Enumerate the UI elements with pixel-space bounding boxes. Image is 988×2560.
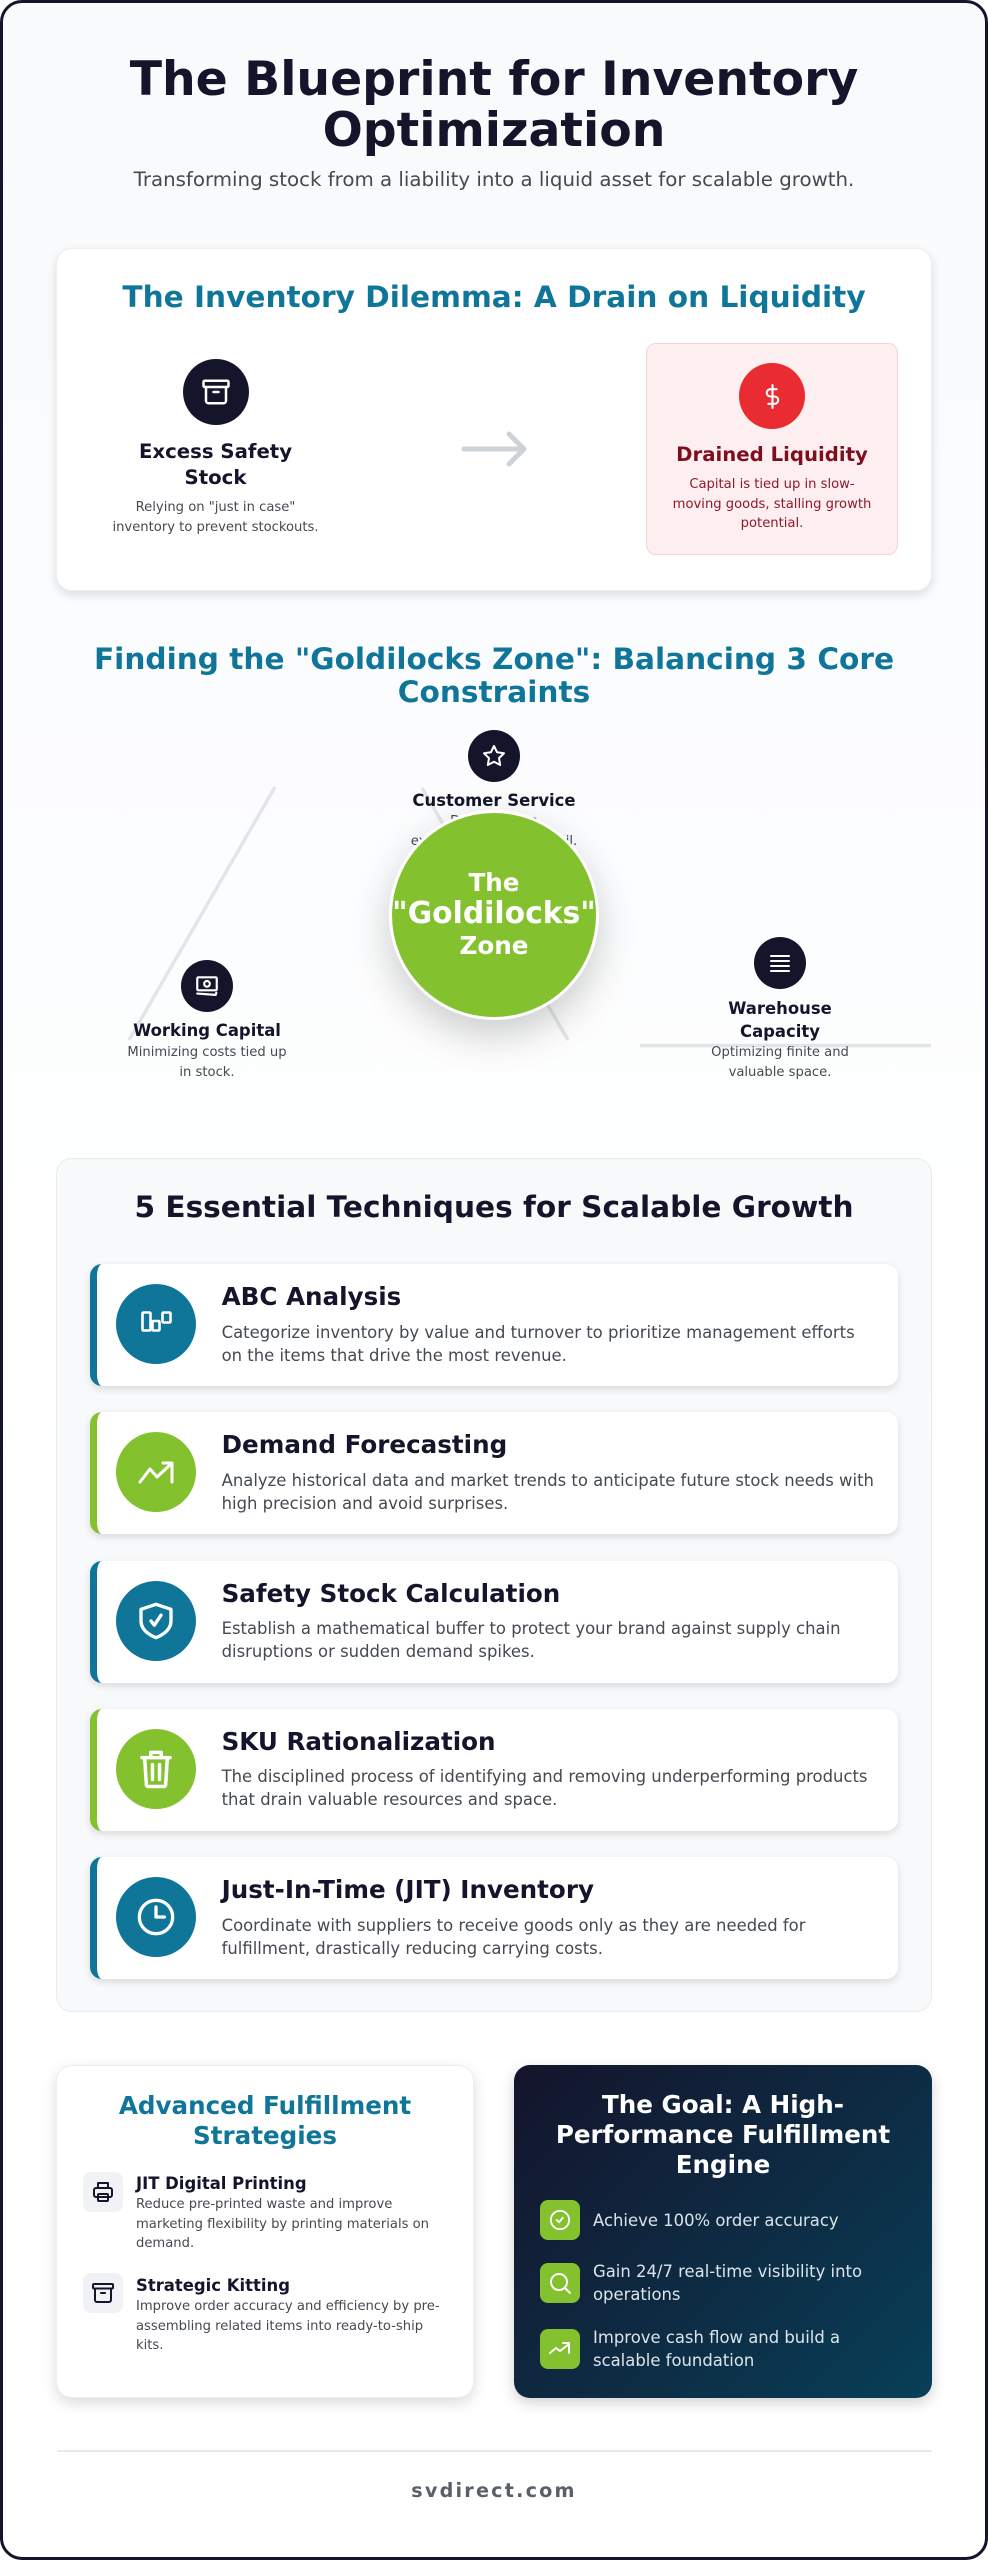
demand forecasting title: Demand Forecasting [222, 1430, 507, 1459]
icon: star [468, 730, 520, 782]
heading: goldilocks zone [94, 642, 894, 709]
safety stock title: Safety Stock Calculation [222, 1578, 560, 1608]
panel: the goal [514, 2065, 932, 2398]
demand forecasting description: high precision and avoid surprises. [222, 1494, 508, 1513]
JIT digital printing description: Reduce pre-printed waste and improve [136, 2197, 392, 2212]
JIT digital printing description: demand. [136, 2236, 194, 2251]
SKU rationalization title: SKU Rationalization [222, 1727, 496, 1756]
warehouse capacity description: valuable space. [729, 1065, 831, 1080]
icon: growth [540, 2329, 580, 2369]
drained liquidity description: potential. [741, 516, 803, 531]
central circle: goldilocks zone: The [468, 868, 519, 896]
excess safety stock description: Relying on "just in case" [136, 500, 295, 515]
ABC analysis title: ABC Analysis [222, 1282, 401, 1311]
central circle: goldilocks zone: "Goldilocks" [392, 896, 596, 930]
warehouse capacity description [711, 1045, 849, 1080]
heading: advanced fulfillment: Strategies [193, 2121, 337, 2150]
strategic kitting title: Strategic Kitting [136, 2276, 290, 2295]
title: Optimization [323, 103, 665, 158]
working capital description: Minimizing costs tied up [127, 1045, 287, 1060]
SKU rationalization description: that drain valuable resources and space. [222, 1790, 557, 1809]
working capital description [127, 1045, 287, 1080]
goal text: order accuracy: Achieve 100% order accuracy [593, 2211, 839, 2230]
heading: advanced fulfillment: Advanced Fulfillment [119, 2091, 411, 2120]
JIT description: Coordinate with suppliers to receive goods only as they are needed for [222, 1916, 806, 1934]
icon: check circle [540, 2200, 580, 2240]
drained liquidity heading: Drained Liquidity [676, 443, 868, 466]
heading: the goal: The Goal: A High- [602, 2090, 844, 2119]
strategic kitting description: Improve order accuracy and efficiency by pre- [136, 2299, 440, 2314]
safety stock description [222, 1619, 841, 1661]
subtitle: Transforming stock from a liability into a liquid asset for scalable growth. [134, 168, 854, 191]
heading: the goal: Engine [676, 2150, 770, 2179]
customer service description [411, 814, 577, 849]
card: safety stock calculation [90, 1560, 898, 1682]
JIT digital printing title: JIT Digital Printing [136, 2174, 307, 2193]
ABC analysis description: on the items that drive the most revenue. [222, 1346, 567, 1364]
goal text: real-time visibility: operations [593, 2285, 680, 2304]
connector lines [128, 786, 931, 1048]
SKU rationalization description: The disciplined process of identifying and removing underperforming products [222, 1767, 868, 1786]
excess safety stock description [112, 500, 319, 535]
icon: printer [83, 2172, 123, 2212]
panel: techniques [56, 1158, 932, 2012]
strategic kitting description: assembling related items into ready-to-ship [136, 2319, 423, 2334]
heading: techniques: 5 Essential Techniques for Scalable Growth [134, 1190, 854, 1224]
icon: archive [83, 2273, 123, 2313]
SKU rationalization description [222, 1767, 868, 1809]
warehouse capacity label [728, 999, 832, 1041]
footer divider [57, 2450, 932, 2452]
icon: banknote [181, 960, 233, 1012]
icon: archive box [182, 359, 248, 425]
excess safety stock heading: Stock [185, 466, 246, 489]
panel: inventory dilemma [56, 248, 932, 591]
title: The Blueprint for Inventory [130, 52, 858, 107]
working capital label: Working Capital [133, 1021, 281, 1040]
icon: trash [116, 1729, 196, 1809]
heading: goldilocks zone: Constraints [398, 675, 590, 709]
arrow [462, 432, 526, 466]
goal text: cash flow: Improve cash flow and build a [593, 2328, 840, 2347]
icon: stacked lines [754, 937, 806, 989]
safety stock description: disruptions or sudden demand spikes. [222, 1642, 535, 1661]
goal text: cash flow [593, 2328, 840, 2370]
central circle: goldilocks zone: Zone [460, 930, 528, 960]
customer service description: Delivering on [450, 814, 538, 829]
JIT description: fulfillment, drastically reducing carrying costs. [222, 1938, 603, 1958]
card: SKU rationalization [90, 1709, 898, 1831]
customer service description: expectations without fail. [411, 834, 577, 849]
heading: the goal: Performance Fulfillment [556, 2120, 890, 2149]
ABC analysis description [222, 1322, 855, 1364]
node: working capital [127, 960, 287, 1080]
heading: goldilocks zone: Finding the "Goldilocks Zone": Balancing 3 Core [94, 642, 894, 676]
safety stock description: Establish a mathematical buffer to protect your brand against supply chain [222, 1619, 841, 1638]
panel: drained liquidity [646, 342, 898, 554]
card: demand forecasting [90, 1412, 898, 1534]
central circle: goldilocks zone [389, 810, 599, 1020]
goal text: real-time visibility [593, 2262, 862, 2304]
excess safety stock description: inventory to prevent stockouts. [112, 520, 319, 535]
goal text: real-time visibility: Gain 24/7 real-time visibility into [593, 2262, 862, 2281]
goal text: cash flow: scalable foundation [593, 2351, 754, 2370]
working capital description: in stock. [179, 1065, 235, 1080]
strategic kitting description: kits. [136, 2338, 163, 2353]
card: ABC analysis [90, 1264, 898, 1386]
ABC analysis description: Categorize inventory by value and turnover to prioritize management efforts [222, 1322, 855, 1342]
demand forecasting description [222, 1471, 874, 1513]
drained liquidity description: Capital is tied up in slow- [689, 477, 855, 492]
warehouse capacity label: Capacity [740, 1022, 820, 1041]
heading: inventory dilemma: The Inventory Dilemma: A Drain on Liquidity [122, 280, 866, 314]
excess safety stock heading [139, 440, 292, 489]
JIT digital printing description [136, 2197, 429, 2251]
demand forecasting description: Analyze historical data and market trends to anticipate future stock needs with [222, 1471, 874, 1490]
heading: the goal [556, 2090, 890, 2179]
strategic kitting description [136, 2299, 440, 2353]
warehouse capacity label: Warehouse [728, 999, 832, 1018]
icon: search [540, 2263, 580, 2303]
node: customer service [411, 730, 577, 849]
icon: trending up [116, 1432, 196, 1512]
heading: advanced fulfillment [119, 2091, 411, 2150]
JIT title: Just-In-Time (JIT) Inventory [222, 1875, 594, 1904]
JIT description [222, 1916, 806, 1958]
customer service label: Customer Service [412, 791, 576, 810]
node: warehouse capacity [711, 937, 849, 1080]
panel: advanced fulfillment strategies [56, 2065, 474, 2398]
JIT digital printing description: marketing flexibility by printing materials on [136, 2217, 429, 2232]
drained liquidity description: moving goods, stalling growth [673, 497, 871, 512]
icon: bars [116, 1284, 196, 1364]
icon: clock [116, 1877, 196, 1957]
icon: dollar [739, 363, 805, 429]
icon: shield check [116, 1580, 196, 1660]
warehouse capacity description: Optimizing finite and [711, 1045, 849, 1060]
title [130, 52, 858, 158]
excess safety stock heading: Excess Safety [139, 440, 292, 463]
footer brand: svdirect.com [411, 2479, 577, 2502]
card: just-in-time inventory [90, 1857, 898, 1979]
drained liquidity description [673, 477, 871, 531]
